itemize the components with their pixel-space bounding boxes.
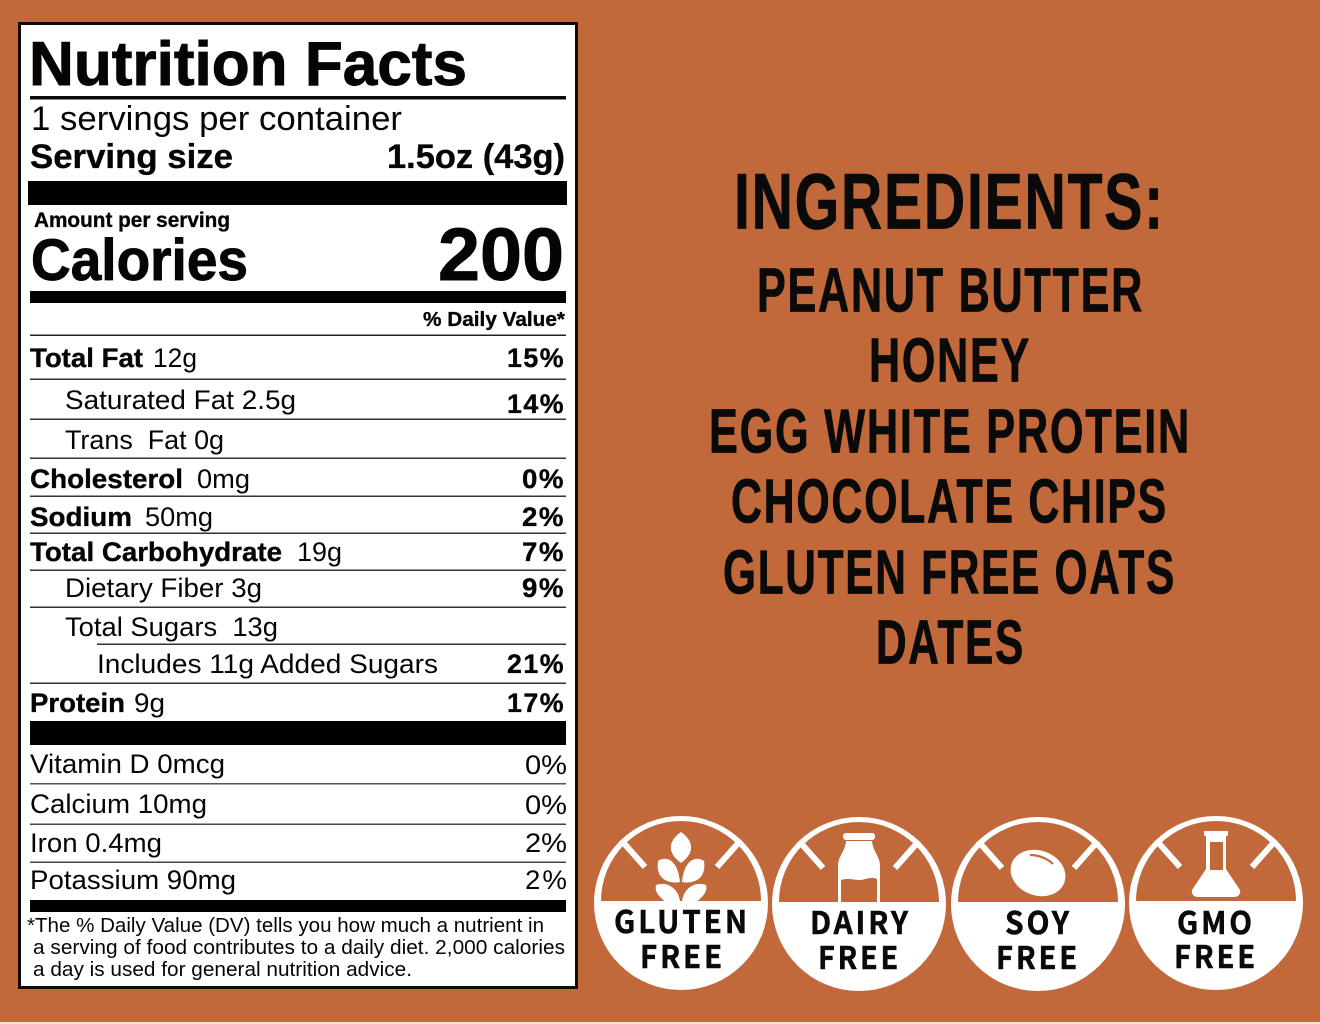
row: total fat [30, 343, 565, 373]
row: sodium: 2% [522, 502, 565, 532]
row: protein: 17% [507, 688, 565, 718]
row: sodium: 50mg [145, 502, 213, 532]
calories row: 200 [438, 213, 564, 296]
row: sodium: Sodium [30, 502, 132, 532]
row: iron: 2% [525, 828, 567, 858]
row: calcium [30, 789, 567, 820]
calories row [31, 213, 564, 296]
row: iron: Iron 0.4mg [30, 828, 162, 858]
row: cholesterol: 0mg [197, 464, 250, 494]
row: cholesterol: 0% [522, 464, 565, 494]
badge: dairy free: FREE [818, 933, 901, 978]
row: total fat: 12g [153, 343, 197, 373]
row: calcium: 0% [525, 790, 567, 820]
badge: soy free: SOY [1005, 898, 1072, 943]
badge: gluten free [594, 816, 768, 990]
ingredients list [709, 256, 1191, 678]
icon: soybean [1004, 842, 1072, 904]
row: total carbohydrate: 19g [297, 537, 342, 567]
serving size row: Serving size [30, 138, 233, 176]
badge: soy free: FREE [996, 933, 1080, 978]
row: total carbohydrate: Total Carbohydrate [30, 537, 282, 567]
row: potassium [30, 865, 569, 895]
row: protein [30, 688, 565, 718]
icon: wheat [656, 832, 706, 903]
row: added sugars: Includes 11g Added Sugars [97, 649, 438, 679]
badge: gmo free [1129, 816, 1303, 990]
icon: milk bottle [838, 833, 880, 902]
row: potassium: Potassium 90mg [30, 865, 236, 895]
row: vitamin d [30, 749, 567, 780]
badge: dairy free [772, 817, 946, 991]
panel: nutrition facts label [20, 24, 576, 988]
title: Nutrition Facts: Nutrition Facts [29, 30, 467, 99]
icon: flask [1192, 831, 1240, 897]
badge: soy free [951, 817, 1125, 991]
serving size row: 1.5oz (43g) [387, 138, 565, 176]
row: added sugars: 21% [507, 649, 565, 679]
row: cholesterol: Cholesterol [30, 464, 183, 494]
row: vitamin d: 0% [525, 750, 567, 780]
row: total sugars: Total Sugars 13g [65, 612, 278, 642]
footnote: *The % Daily Value (DV) tells you how much a nutrient in [27, 915, 544, 937]
servings per container: 1 servings per container [31, 100, 402, 138]
row: protein: 9g [134, 688, 165, 718]
row: cholesterol [30, 464, 565, 494]
badge: gluten free: GLUTEN [614, 897, 750, 942]
footnote: a day is used for general nutrition advice. [33, 959, 412, 981]
badge: gmo free: FREE [1174, 932, 1258, 977]
row: potassium: 2% [525, 865, 569, 895]
footnote: a serving of food contributes to a daily diet. 2,000 calories [33, 937, 565, 959]
row: saturated fat: 14% [507, 389, 565, 419]
badge: gluten free: FREE [640, 932, 725, 977]
badge: gmo free: GMO [1177, 898, 1255, 943]
footnote [27, 915, 565, 981]
ingredients list: HONEY [869, 327, 1031, 396]
row: sodium [30, 502, 565, 532]
row: saturated fat [65, 385, 565, 419]
row: iron [30, 828, 567, 858]
ingredients list: PEANUT BUTTER [757, 256, 1144, 326]
row: dietary fiber: 9% [522, 573, 565, 603]
row: total carbohydrate: 7% [522, 537, 565, 567]
serving size row [30, 138, 565, 176]
amount per serving: Amount per serving [34, 209, 230, 232]
ingredients list: DATES [876, 609, 1025, 678]
row: trans fat: Trans Fat 0g [65, 425, 224, 455]
row: saturated fat: Saturated Fat 2.5g [65, 385, 296, 415]
badge: dairy free: DAIRY [810, 898, 911, 943]
row: dietary fiber [65, 573, 565, 603]
row: total fat: 15% [507, 343, 565, 373]
row: calcium: Calcium 10mg [30, 789, 207, 819]
row: total fat: Total Fat [30, 343, 143, 373]
row: total carbohydrate [30, 537, 565, 567]
row: dietary fiber: Dietary Fiber 3g [65, 573, 262, 603]
calories row: Calories [31, 228, 248, 293]
row: vitamin d: Vitamin D 0mcg [30, 749, 225, 779]
heading: ingredients: INGREDIENTS: [734, 157, 1165, 246]
percent daily value heading: % Daily Value* [423, 308, 565, 331]
row: protein: Protein [30, 688, 125, 718]
